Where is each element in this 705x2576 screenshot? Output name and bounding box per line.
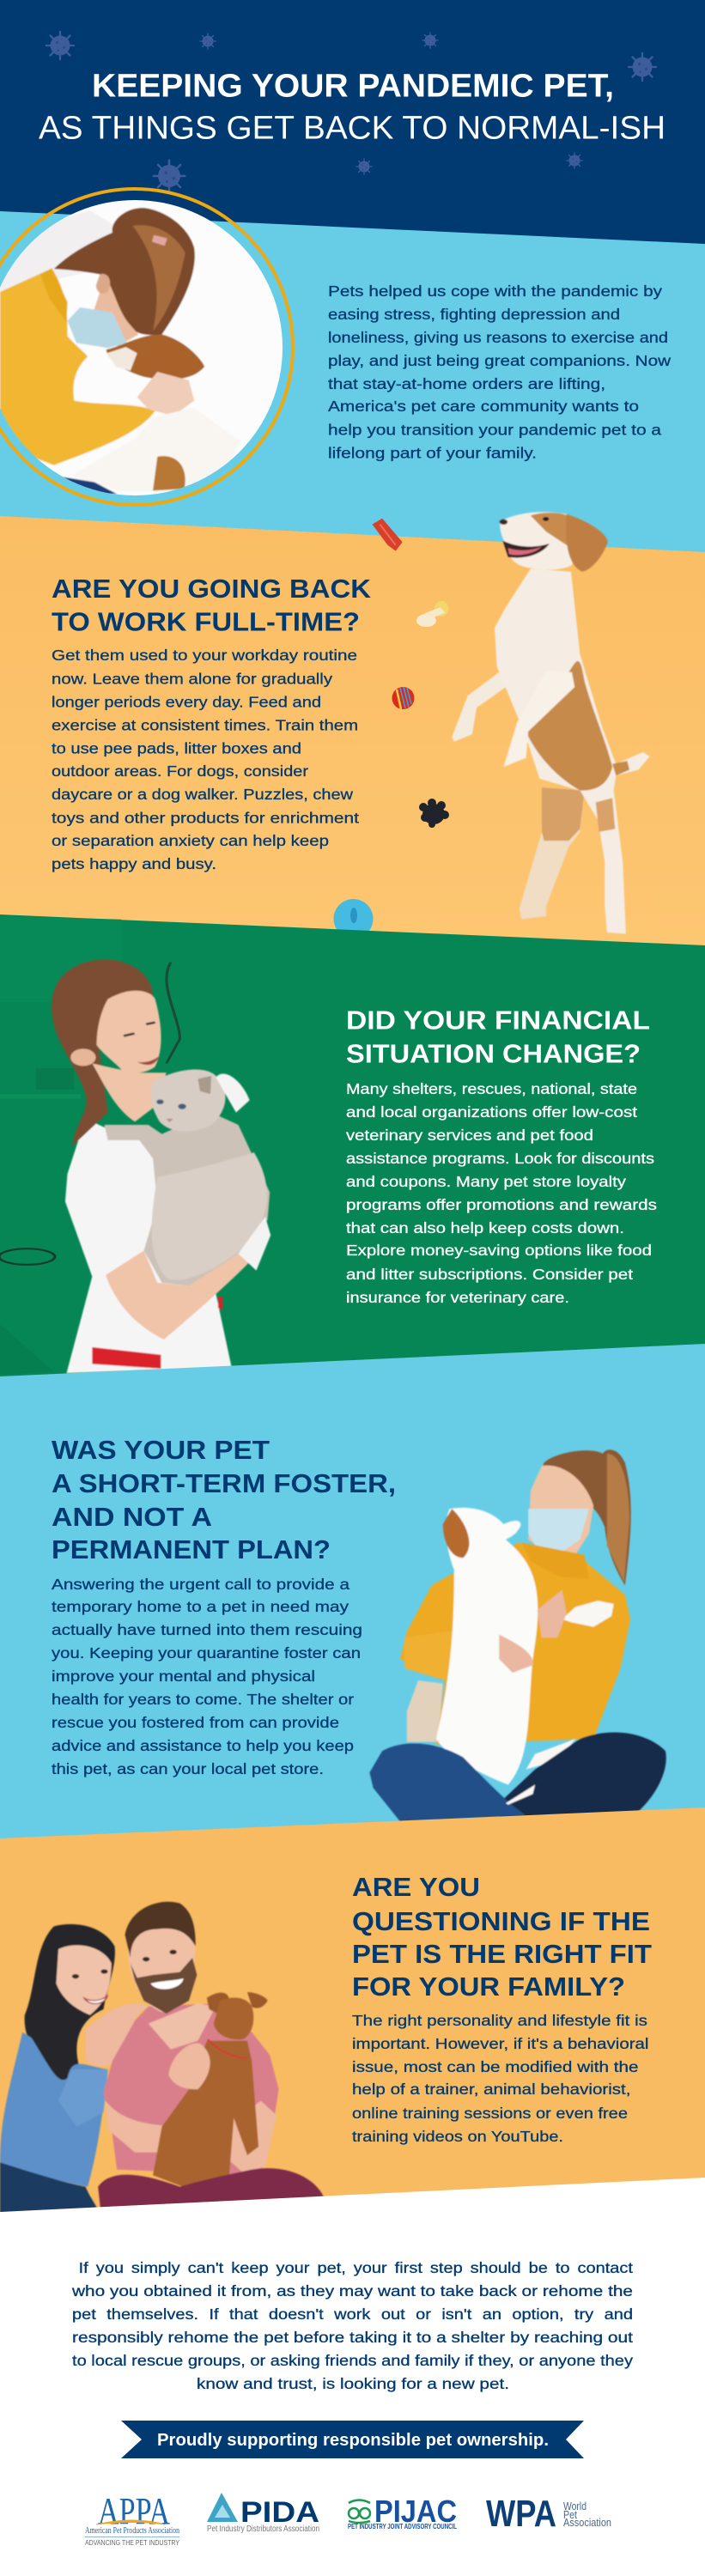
logo: WPA: World [563, 2500, 586, 2512]
text: finances body: veterinary services and pet food [346, 1127, 593, 1144]
panel: intro background [0, 211, 705, 558]
logo: PIJAC: PET INDUSTRY JOINT ADVISORY COUNCIL [348, 2523, 457, 2530]
text: finances body: assistance programs. Look for discounts [346, 1150, 654, 1167]
heading: right fit: ARE YOU [352, 1872, 480, 1902]
heading: finances [346, 1005, 650, 1068]
text: finances body: Explore money-saving options like food [346, 1242, 652, 1259]
text: foster body: health for years to come. The shelter or [52, 1691, 354, 1708]
icon: blue ball toy [333, 899, 373, 939]
ribbon: proudly supporting: Proudly supporting responsible pet ownership. [157, 2431, 549, 2450]
icon: white knot treat [416, 601, 449, 627]
text: back to work body: Get them used to your workday routine [52, 647, 357, 664]
panel: foster background [0, 1344, 705, 1846]
heading: foster: PERMANENT PLAN? [52, 1534, 331, 1564]
text: closing paragraph: to local rescue groups, or asking friends and family if they, or anyone they [72, 2352, 633, 2369]
text: foster body: advice and assistance to help you keep [52, 1737, 354, 1754]
icon: black paw toy [419, 799, 449, 828]
text: back to work body: or separation anxiety can help keep [52, 832, 329, 849]
text: finances body: and local organizations offer low-cost [346, 1103, 637, 1121]
ribbon: proudly supporting [121, 2421, 584, 2458]
icon: red bone toy [373, 519, 403, 551]
logo: PIJAC [348, 2494, 457, 2530]
heading: right fit: FOR YOUR FAMILY? [352, 1971, 625, 2002]
text: intro paragraph: Pets helped us cope with the pandemic by [328, 283, 662, 300]
text: intro paragraph: lifelong part of your family. [328, 445, 537, 462]
text: back to work body: pets happy and busy. [52, 855, 216, 872]
text: right fit body: online training sessions or even free [352, 2105, 628, 2122]
heading: back to work: TO WORK FULL-TIME? [52, 607, 360, 637]
logo: APPA: ADVANCING THE PET INDUSTRY [85, 2539, 180, 2547]
clinic background details [0, 916, 179, 1375]
text: intro paragraph: easing stress, fighting depression and [328, 306, 620, 323]
title [39, 69, 665, 146]
text: closing paragraph: If you simply can't keep your pet, your first step should be to contact [79, 2259, 633, 2276]
heading: right fit [352, 1872, 652, 2002]
text: back to work body: longer periods every day. Feed and [52, 694, 321, 711]
heading: foster [52, 1435, 396, 1564]
logo: WPA: Pet [563, 2508, 577, 2521]
text: intro paragraph: play, and just being great companions. Now [328, 352, 671, 369]
text: finances body: and litter subscriptions. Consider pet [346, 1266, 633, 1283]
text: finances body [346, 1080, 657, 1306]
text: closing paragraph: responsibly rehome the pet before taking it to a shelter by reaching out [72, 2329, 633, 2346]
text: right fit body: important. However, if it's a behavioral [352, 2035, 649, 2052]
text: intro paragraph [328, 283, 671, 462]
text: right fit body [352, 2012, 649, 2145]
logo: WPA: Association [563, 2516, 611, 2529]
text: finances body: that can also help keep costs down. [346, 1219, 624, 1236]
text: back to work body: to use pee pads, litter boxes and [52, 739, 301, 756]
text: finances body: programs offer promotions and rewards [346, 1196, 657, 1213]
text: closing paragraph: pet themselves. If that doesn't work out or isn't an option, try and [72, 2306, 633, 2323]
heading: back to work [52, 574, 372, 637]
logo: WPA: WPA [486, 2493, 556, 2535]
text: intro paragraph: America's pet care community wants to [328, 398, 639, 415]
heading: right fit: PET IS THE RIGHT FIT [352, 1939, 652, 1969]
text: foster body: improve your mental and physical [52, 1668, 315, 1685]
heading: finances: SITUATION CHANGE? [346, 1039, 641, 1068]
heading: right fit: QUESTIONING IF THE [352, 1906, 650, 1936]
text: foster body: Answering the urgent call to provide a [52, 1576, 349, 1593]
heading: foster: AND NOT A [52, 1502, 212, 1532]
icon: striped ball [392, 687, 414, 709]
photo: couple with small brown dog [0, 1902, 324, 2215]
text: right fit body: help of a trainer, animal behaviorist, [352, 2081, 630, 2098]
text: intro paragraph: help you transition your pandemic pet to a [328, 422, 661, 439]
text: back to work body [52, 647, 359, 872]
text: intro paragraph: loneliness, giving us reasons to exercise and [328, 329, 668, 346]
logo: APPA [85, 2490, 180, 2547]
text: closing paragraph: know and trust, is looking for a new pet. [197, 2375, 509, 2392]
text: foster body: actually have turned into them rescuing [52, 1621, 362, 1638]
text: intro paragraph: that stay-at-home orders are lifting, [328, 375, 605, 392]
text: foster body: this pet, as can your local pet store. [52, 1760, 324, 1777]
text: foster body: rescue you fostered from can provide [52, 1714, 339, 1731]
text: back to work body: daycare or a dog walker. Puzzles, chew [52, 786, 353, 803]
logo: APPA: APPA [98, 2490, 170, 2532]
text: back to work body: now. Leave them alone for gradually [52, 670, 332, 687]
text: finances body: and coupons. Many pet store loyalty [346, 1173, 626, 1190]
heading: foster: A SHORT-TERM FOSTER, [52, 1468, 396, 1498]
text: foster body: you. Keeping your quarantine foster can [52, 1644, 361, 1662]
logo: WPA [486, 2493, 611, 2535]
title: AS THINGS GET BACK TO NORMAL-ISH [39, 110, 665, 146]
text: right fit body: The right personality and lifestyle fit is [352, 2012, 647, 2029]
text: closing paragraph: who you obtained it from, as they may want to take back or rehome the [71, 2282, 633, 2300]
text: closing paragraph [71, 2259, 633, 2392]
logo: PIDA: Pet Industry Distributors Association [207, 2524, 319, 2534]
text: back to work body: outdoor areas. For dogs, consider [52, 762, 308, 780]
heading: foster: WAS YOUR PET [52, 1435, 270, 1465]
panel: finances background [0, 914, 705, 1382]
photo: beagle standing on hind legs [452, 512, 650, 934]
photo: woman in mask sitting with small dog [369, 1449, 666, 1821]
icons: virus particles [46, 32, 656, 191]
text: foster body [52, 1576, 362, 1777]
heading: back to work: ARE YOU GOING BACK [52, 574, 372, 604]
text: right fit body: training videos on YouTube. [352, 2128, 563, 2145]
panel: header background [0, 0, 705, 249]
text: back to work body: exercise at consistent times. Train them [52, 716, 358, 733]
text: finances body: Many shelters, rescues, national, state [346, 1080, 637, 1097]
text: foster body: temporary home to a pet in need may [52, 1598, 349, 1615]
logo: PIJAC: PIJAC [374, 2494, 457, 2529]
logo: PIDA [207, 2493, 319, 2534]
logo: APPA: American Pet Products Association [85, 2526, 179, 2536]
title: KEEPING YOUR PANDEMIC PET, [92, 69, 614, 105]
text: right fit body: issue, most can be modified with the [352, 2058, 639, 2075]
photo: woman in mask with dog in circle [0, 189, 315, 513]
heading: finances: DID YOUR FINANCIAL [346, 1005, 650, 1036]
text: finances body: insurance for veterinary care. [346, 1289, 569, 1306]
panel: right fit background [0, 1807, 705, 2212]
panel: back to work background [0, 516, 705, 953]
photo: vet holding cat [52, 959, 270, 1373]
logo: PIDA: PIDA [240, 2496, 319, 2529]
text: back to work body: toys and other products for enrichment [52, 809, 359, 826]
